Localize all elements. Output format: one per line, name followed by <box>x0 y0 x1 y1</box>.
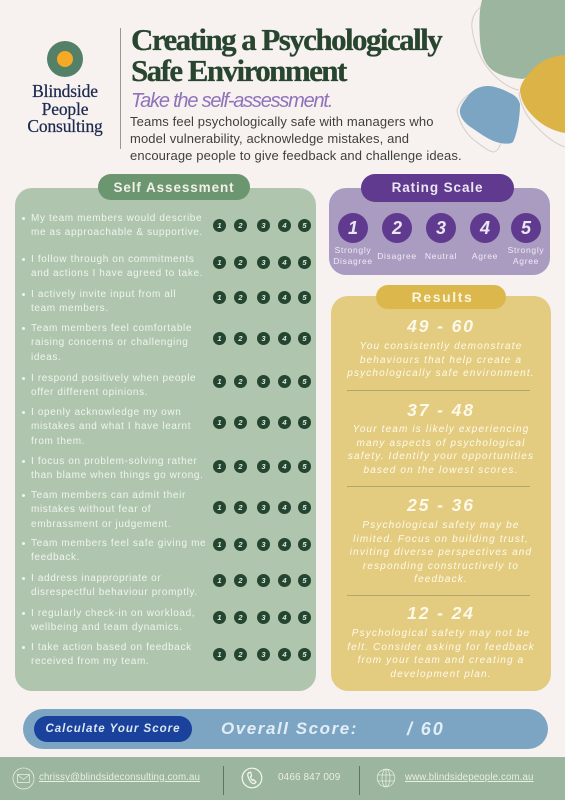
rating label 1: Disagree <box>333 256 373 266</box>
rating 12: 5 <box>302 650 307 659</box>
website: www.blindsidepeople.com.au <box>405 772 534 783</box>
header divider <box>120 28 121 149</box>
rating 9 <box>213 538 311 551</box>
rating 8: 3 <box>261 503 266 512</box>
question 1 <box>22 212 212 241</box>
rating 11: 2 <box>238 613 243 622</box>
question 3 <box>22 288 212 317</box>
rating 5: 5 <box>302 377 307 386</box>
rating 5: 3 <box>261 377 266 386</box>
rating 12 <box>213 648 311 661</box>
question 12: I take action based on feedback <box>31 642 192 653</box>
rating 12: 2 <box>238 650 243 659</box>
subtitle: Take the self-assessment. <box>131 90 332 112</box>
question 4 <box>22 322 212 365</box>
rating 4 <box>213 332 311 345</box>
rating circle 5: 5 <box>521 218 531 238</box>
description: psychologically safe environment. <box>347 368 535 379</box>
description: safety. Identify your opportunities <box>348 451 534 462</box>
rating 9: 5 <box>302 540 307 549</box>
logo wordmark: Blindside <box>32 81 98 101</box>
rating 7: 1 <box>217 462 222 471</box>
rating 5: 4 <box>282 377 287 386</box>
rating 6: 2 <box>238 418 243 427</box>
rating 1 <box>213 219 311 232</box>
logo mark <box>47 41 83 77</box>
heading: self assessment: Self Assessment <box>113 180 235 195</box>
rating 3: 1 <box>217 293 222 302</box>
heading: rating scale <box>361 174 514 202</box>
question 3: I actively invite input from all <box>31 289 176 300</box>
description: behaviours that help create a <box>360 354 522 366</box>
email address: chrissy@blindsideconsulting.com.au <box>39 772 200 783</box>
score range: 49 - 60 <box>407 316 475 336</box>
result 49-60 <box>347 316 535 379</box>
rating 9: 1 <box>217 540 222 549</box>
rating 10: 2 <box>238 576 243 585</box>
rating 6: 1 <box>217 418 222 427</box>
description: many aspects of psychological <box>356 438 525 448</box>
icon: email <box>12 768 34 790</box>
rating 11: 5 <box>302 613 307 622</box>
rating label 5: Agree <box>513 256 539 266</box>
question 9: feedback. <box>31 552 80 563</box>
rating 4: 1 <box>217 334 222 343</box>
question 9 <box>22 537 212 566</box>
heading: self assessment <box>98 174 250 200</box>
intro text <box>130 114 462 163</box>
rating 3: 3 <box>261 293 266 302</box>
rating 11: 1 <box>217 613 222 622</box>
description <box>347 628 535 680</box>
rating 9: 3 <box>261 540 266 549</box>
question 2: and actions I have agreed to take. <box>31 268 203 279</box>
rating 8 <box>213 501 311 514</box>
description: Psychological safety may not be <box>352 628 530 639</box>
rating 10: 1 <box>217 576 222 585</box>
rating 5: 1 <box>217 377 222 386</box>
question 11 <box>22 607 212 636</box>
rating circle 3 <box>426 213 456 243</box>
rating 12: 1 <box>217 650 222 659</box>
logo wordmark: People <box>42 98 88 118</box>
question 7: than blame when things go wrong. <box>31 470 203 481</box>
score range: 25 - 36 <box>407 495 475 515</box>
rating 7: 5 <box>302 462 307 471</box>
rating 3: 2 <box>238 293 243 302</box>
rating label 5: Strongly <box>508 245 544 255</box>
heading: results <box>376 285 506 309</box>
intro text: encourage people to give feedback and challenge ideas. <box>130 148 462 163</box>
description: from your team and creating a <box>358 655 524 666</box>
question 1: me as approachable & supportive. <box>31 227 203 238</box>
heading: results: Results <box>412 289 473 305</box>
rating 8: 2 <box>238 503 243 512</box>
rating 4: 4 <box>282 334 287 343</box>
heading: rating scale: Rating Scale <box>392 180 483 195</box>
question 12: received from my team. <box>31 656 149 667</box>
rating 2: 3 <box>261 258 266 267</box>
description: felt. Consider asking for feedback <box>347 642 535 652</box>
logo wordmark: Consulting <box>27 116 103 136</box>
description: Psychological safety may be <box>362 520 520 531</box>
rating 1: 2 <box>238 221 243 230</box>
intro text: Teams feel psychologically safe with managers who <box>130 114 434 129</box>
rating 1: 5 <box>302 221 307 230</box>
question 7 <box>22 455 212 484</box>
rating 3: 5 <box>302 293 307 302</box>
description: feedback. <box>414 574 468 585</box>
rating 5 <box>213 375 311 388</box>
rating circle 1: 1 <box>348 218 358 238</box>
rating 6: 3 <box>261 418 266 427</box>
button: calculate your score <box>34 716 192 742</box>
rating 12: 3 <box>261 650 266 659</box>
questions list <box>22 213 311 667</box>
rating circle 5 <box>511 213 541 243</box>
rating label 4: Agree <box>472 251 498 261</box>
rating circle 2 <box>382 213 412 243</box>
question 9: Team members feel safe giving me <box>31 538 206 549</box>
rating circle 3: 3 <box>436 218 446 238</box>
rating label 3: Neutral <box>425 251 457 261</box>
icon: phone <box>242 768 262 788</box>
question 7: I focus on problem-solving rather <box>31 456 197 467</box>
question 6: mistakes and what I have learnt <box>31 421 191 432</box>
rating circle 4: 4 <box>480 218 490 238</box>
description: based on the lowest scores. <box>363 464 518 476</box>
rating 9: 2 <box>238 540 243 549</box>
score range: 37 - 48 <box>407 400 475 420</box>
title: Safe Environment <box>131 53 346 88</box>
rating 11: 4 <box>282 613 287 622</box>
rating label 1: Strongly <box>335 245 371 255</box>
result 12-24 <box>347 603 535 680</box>
decorative blobs <box>456 0 565 152</box>
rating label 5 <box>508 245 544 266</box>
score total: / 60 <box>407 719 445 739</box>
rating 2: 2 <box>238 258 243 267</box>
description: responding constructively to <box>363 560 519 572</box>
rating 1: 4 <box>282 221 287 230</box>
result 25-36 <box>350 495 532 585</box>
panel: self assessment <box>15 188 316 691</box>
rating 9: 4 <box>282 540 287 549</box>
rating 2: 5 <box>302 258 307 267</box>
question 6 <box>22 406 212 449</box>
rating 4: 3 <box>261 334 266 343</box>
rating 7: 2 <box>238 462 243 471</box>
rating 4: 2 <box>238 334 243 343</box>
question 8 <box>22 489 212 532</box>
rating 6: 5 <box>302 418 307 427</box>
phone number: 0466 847 009 <box>278 772 340 783</box>
rating 1: 1 <box>217 221 222 230</box>
description: Your team is likely experiencing <box>353 424 529 435</box>
question 10: disrespectful behaviour promptly. <box>31 587 198 598</box>
rating 12: 4 <box>282 650 287 659</box>
score range: 12 - 24 <box>407 603 475 623</box>
rating 11 <box>213 611 311 624</box>
rating 3 <box>213 291 311 304</box>
result 37-48 <box>348 400 534 476</box>
rating 2: 4 <box>282 258 287 267</box>
question 11: wellbeing and team dynamics. <box>31 622 183 633</box>
rating circle 4 <box>470 213 500 243</box>
rating circle 1 <box>338 213 368 243</box>
rating label 2: Disagree <box>377 251 417 261</box>
rating 1: 3 <box>261 221 266 230</box>
question 4: raising concerns or challenging <box>31 337 188 348</box>
description: limited. Focus on building trust, <box>353 534 529 544</box>
rating 10: 5 <box>302 576 307 585</box>
question 1: My team members would describe <box>31 213 202 224</box>
question 11: I regularly check-in on workload, <box>31 608 195 619</box>
rating 6: 4 <box>282 418 287 427</box>
rating circle 2: 2 <box>392 218 402 238</box>
description: You consistently demonstrate <box>360 341 522 352</box>
footer <box>0 757 565 800</box>
icon: globe <box>376 768 396 788</box>
question 10: I address inappropriate or <box>31 573 161 584</box>
question 10 <box>22 572 212 601</box>
question 5: I respond positively when people <box>31 373 196 384</box>
rating 10: 4 <box>282 576 287 585</box>
rating 7: 3 <box>261 462 266 471</box>
score bar <box>23 709 548 749</box>
question 8: Team members can admit their <box>31 490 186 501</box>
question 12 <box>22 641 212 670</box>
rating 8: 4 <box>282 503 287 512</box>
question 6: I openly acknowledge my own <box>31 407 181 418</box>
question 2: I follow through on commitments <box>31 254 194 265</box>
rating 2: 1 <box>217 258 222 267</box>
title <box>131 22 443 88</box>
rating 7: 4 <box>282 462 287 471</box>
description: inviting diverse perspectives and <box>350 547 532 558</box>
overall score label: Overall Score: <box>221 719 358 738</box>
rating 2 <box>213 256 311 269</box>
question 5 <box>22 372 212 401</box>
rating 4: 5 <box>302 334 307 343</box>
intro text: model vulnerability, acknowledge mistakes, and <box>130 131 409 146</box>
question 6: from them. <box>31 436 85 447</box>
question 2 <box>22 253 212 282</box>
description: development plan. <box>390 668 492 680</box>
rating 10: 3 <box>261 576 266 585</box>
rating 8: 5 <box>302 503 307 512</box>
rating 3: 4 <box>282 293 287 302</box>
rating 8: 1 <box>217 503 222 512</box>
panel: rating scale <box>329 188 550 275</box>
question 4: Team members feel comfortable <box>31 323 192 334</box>
question 5: offer different opinions. <box>31 387 148 398</box>
rating 5: 2 <box>238 377 243 386</box>
rating 6 <box>213 416 311 429</box>
logo wordmark <box>27 81 103 136</box>
question 8: mistakes without fear of <box>31 504 151 515</box>
title: Creating a Psychologically <box>131 22 441 57</box>
question 4: ideas. <box>31 352 61 363</box>
rating scale items <box>333 213 544 266</box>
question 3: team members. <box>31 303 109 314</box>
logo <box>27 41 103 136</box>
button: calculate your score: Calculate Your Score <box>45 723 181 735</box>
description <box>348 424 534 476</box>
rating label 1 <box>333 245 373 266</box>
description <box>350 520 532 585</box>
rating 11: 3 <box>261 613 266 622</box>
rating 10 <box>213 574 311 587</box>
question 8: embrassment or judgement. <box>31 519 171 530</box>
panel: results <box>331 296 551 691</box>
description <box>347 341 535 379</box>
rating 7 <box>213 460 311 473</box>
